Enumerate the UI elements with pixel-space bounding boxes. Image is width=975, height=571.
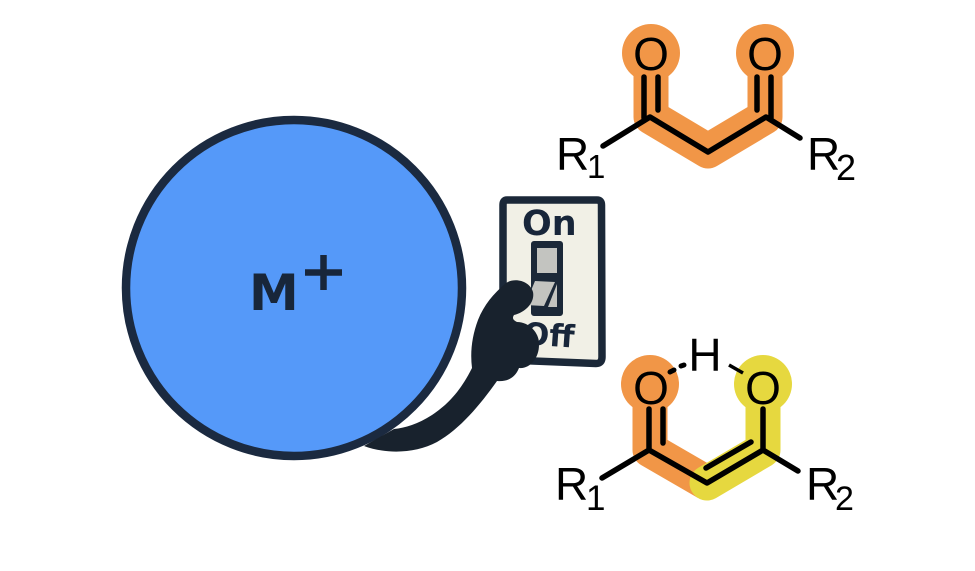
atom labels: O xyxy=(633,28,669,80)
hand and arm pressing the switch xyxy=(364,280,539,452)
switch plate xyxy=(503,200,602,364)
orange highlight xyxy=(622,24,794,151)
atom labels: R xyxy=(556,128,589,180)
label: M+: M xyxy=(249,264,299,322)
metal ion circle xyxy=(126,120,462,456)
atom labels: R xyxy=(555,458,588,510)
molecule: diketo form xyxy=(556,24,856,188)
label: Off: Off xyxy=(522,316,576,356)
bonds xyxy=(602,409,798,483)
atom labels: R xyxy=(807,128,840,180)
light switch xyxy=(503,200,602,364)
atom labels: O xyxy=(747,28,783,80)
atom labels: O xyxy=(745,362,781,414)
atom labels: 1 xyxy=(586,479,605,518)
atom labels xyxy=(556,28,856,188)
toggle xyxy=(525,243,561,314)
plus sign xyxy=(305,255,342,290)
atom labels: 1 xyxy=(587,148,605,185)
orange highlight xyxy=(621,355,707,483)
hydrogen bond xyxy=(670,365,684,372)
molecule: enol form xyxy=(555,329,854,518)
bonds xyxy=(603,77,800,152)
atom labels: H xyxy=(688,329,722,381)
atom labels: 2 xyxy=(835,480,854,518)
atom labels xyxy=(555,329,854,518)
atom labels: O xyxy=(633,362,669,414)
label: On: On xyxy=(522,204,577,244)
yellow highlight xyxy=(707,355,792,483)
O-H bond xyxy=(729,365,743,373)
atom labels: 2 xyxy=(836,147,856,188)
atom labels: R xyxy=(806,458,839,510)
